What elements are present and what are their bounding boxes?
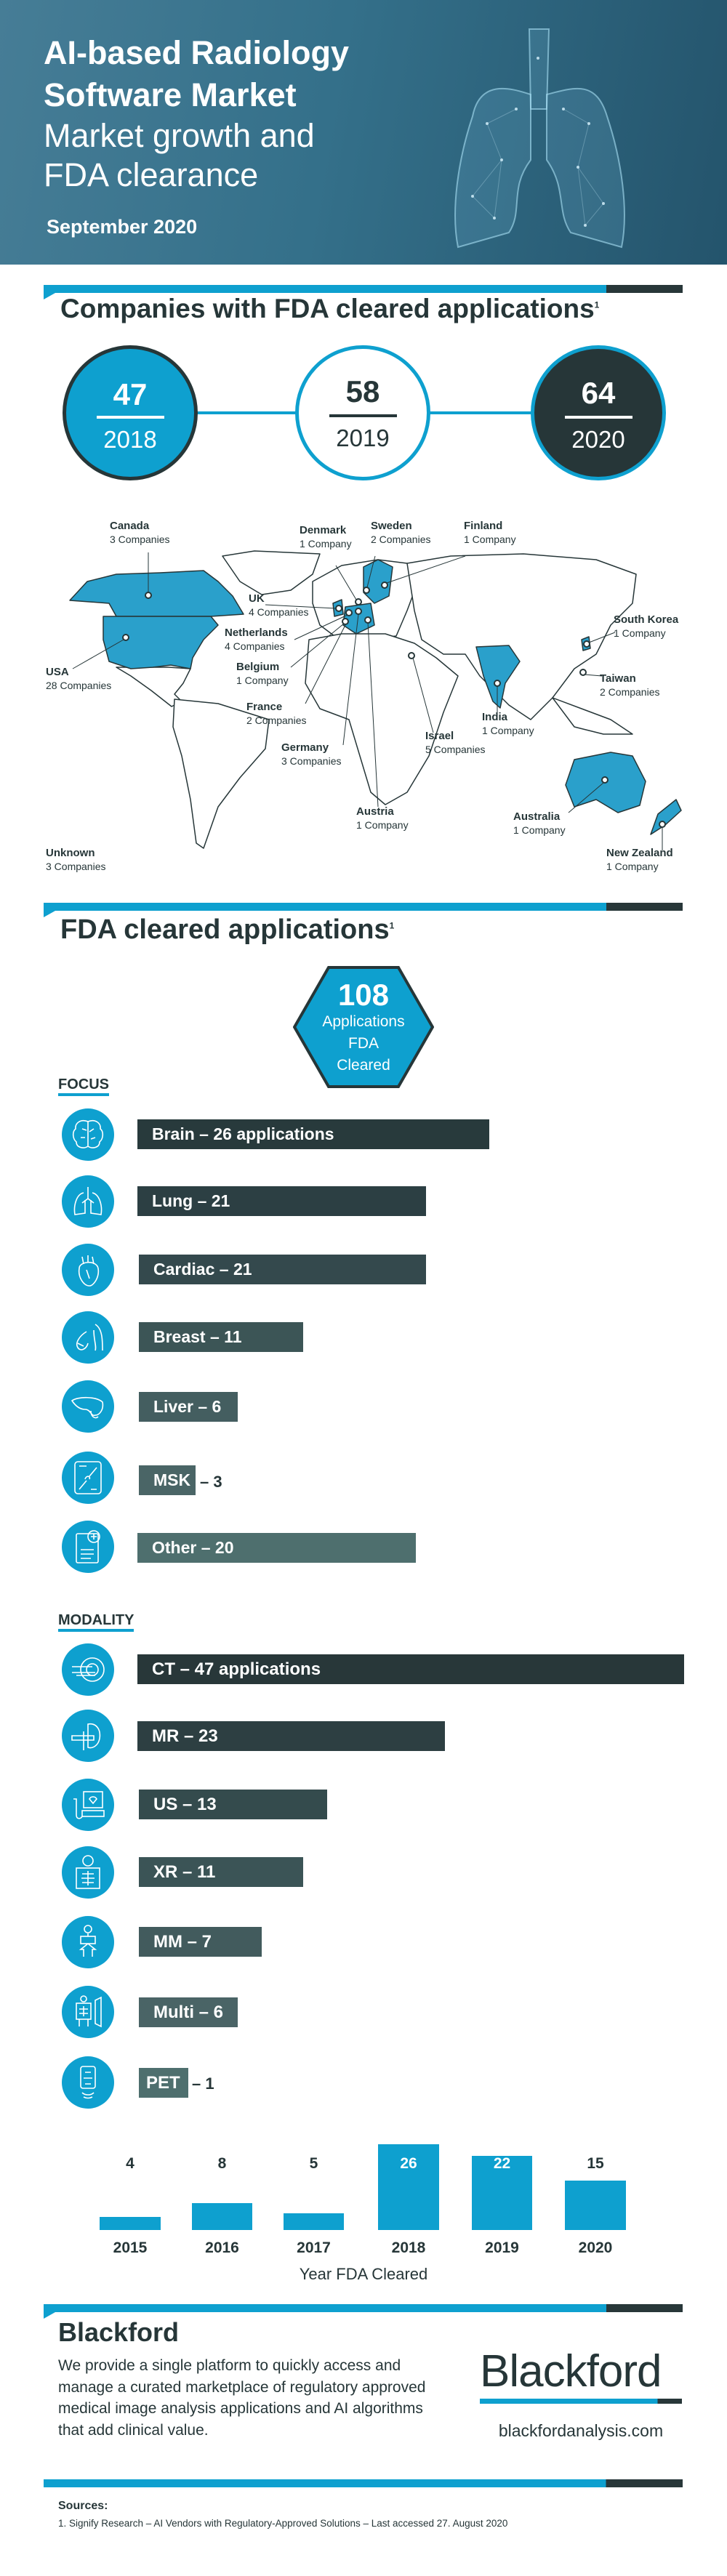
- circle 2020: [531, 345, 666, 480]
- heading: companies: Companies with FDA cleared applications1: [60, 294, 599, 323]
- world map: 1 Company: [236, 675, 289, 686]
- circle 2019: 58: [346, 374, 379, 408]
- bar: CT: [137, 1654, 684, 1684]
- column chart: year FDA cleared: 2018: [392, 2239, 425, 2256]
- illustration: glowing lungs: [454, 28, 625, 249]
- circle 2019: [295, 345, 430, 480]
- world map: 1 Company: [606, 861, 659, 872]
- icon: breast: [62, 1311, 114, 1364]
- world map: 2 Companies: [600, 686, 660, 698]
- column chart: year FDA cleared: 15: [587, 2155, 604, 2172]
- hexagon: 108 applications: Applications: [322, 1013, 405, 1030]
- timeline circles: [63, 345, 666, 480]
- world map: 1 Company: [356, 819, 409, 831]
- sources: [58, 2500, 507, 2529]
- footer: Blackford about: We provide a single platform to quickly access and manage a curated marketplace of regulatory approved medical image analysis applications and AI algorithms that add clinical value.: [58, 2357, 425, 2438]
- icon: CT: [62, 1643, 114, 1696]
- bar: XR: XR – 11: [153, 1862, 215, 1882]
- bar: PET: [139, 2068, 188, 2098]
- world map: USA: [46, 666, 69, 678]
- value: msk: – 3: [200, 1473, 222, 1491]
- bar: lung: Lung – 21: [152, 1191, 230, 1210]
- hexagon: 108 applications: 108: [338, 978, 389, 1012]
- column chart: year FDA cleared: 4: [126, 2155, 134, 2172]
- circle 2020: 64: [582, 376, 615, 410]
- footer: Blackford about: Blackford: [58, 2317, 179, 2347]
- map labels: [110, 520, 170, 545]
- bar: liver: [139, 1392, 238, 1422]
- world map: Denmark: [300, 524, 346, 536]
- column chart: year FDA cleared: 2020: [579, 2239, 612, 2256]
- world map: Austria: [356, 805, 394, 818]
- world map: 1 Company: [300, 538, 352, 550]
- bar: brain: Brain – 26 applications: [152, 1124, 334, 1143]
- bar: breast: Breast – 11: [153, 1327, 241, 1346]
- logo: Blackford: blackfordanalysis.com: [499, 2421, 663, 2440]
- heading: FDA cleared applications: FDA cleared applications1: [60, 914, 394, 945]
- bar: cardiac: Cardiac – 21: [153, 1260, 252, 1279]
- icon: US: [62, 1779, 114, 1831]
- world map: Unknown: [46, 847, 95, 859]
- world map: 1 Company: [464, 534, 516, 545]
- circle 2020: 2020: [571, 426, 625, 453]
- date: September 2020: [47, 216, 197, 238]
- world map: 2 Companies: [246, 715, 307, 726]
- world map: 28 Companies: [46, 680, 111, 691]
- world map: 5 Companies: [425, 744, 486, 755]
- world map: New Zealand: [606, 847, 673, 859]
- world map: 1 Company: [614, 627, 666, 639]
- sources: Sources:: [58, 2500, 108, 2512]
- circle 2019: 2019: [336, 424, 390, 451]
- world map: Taiwan: [600, 672, 636, 685]
- bar: PET: PET: [146, 2073, 180, 2093]
- column chart: year FDA cleared: 2015: [113, 2239, 147, 2256]
- icon: XR: [62, 1846, 114, 1899]
- map labels: 3 Companies: [110, 534, 170, 545]
- world map: 1 Company: [482, 725, 534, 736]
- world map: Australia: [513, 810, 560, 823]
- bar: other: Other – 20: [152, 1538, 234, 1557]
- map labels: Canada: [110, 520, 149, 532]
- world map: France: [246, 701, 282, 713]
- world map: 1 Company: [513, 824, 566, 836]
- world map: Germany: [281, 741, 329, 754]
- bar: cardiac: [139, 1255, 426, 1284]
- world map: Israel: [425, 730, 454, 742]
- bar: msk: MSK: [153, 1470, 190, 1489]
- column chart: year FDA cleared: 8: [218, 2155, 226, 2172]
- title: [44, 34, 349, 113]
- hexagon: 108 applications: Cleared: [337, 1057, 390, 1074]
- focus chart: [62, 1108, 489, 1573]
- circle 2018: [63, 345, 198, 480]
- column chart: year FDA cleared: 22: [494, 2155, 510, 2172]
- modality chart: [62, 1643, 684, 2109]
- world map: South Korea: [614, 613, 678, 626]
- bar: US: US – 13: [153, 1795, 217, 1814]
- bar: MR: [137, 1721, 445, 1751]
- world map: Belgium: [236, 661, 279, 673]
- icon: brain: [62, 1108, 114, 1161]
- icon: lung: [62, 1175, 114, 1228]
- world map: 3 Companies: [46, 861, 106, 872]
- icon: liver: [62, 1380, 114, 1433]
- value: PET: – 1: [192, 2074, 214, 2093]
- hexagon: 108 applications: [293, 966, 434, 1088]
- world map: UK: [249, 592, 265, 605]
- world map: 4 Companies: [249, 606, 308, 618]
- bar: Multi: [139, 1997, 238, 2027]
- column chart: year FDA cleared: Year FDA Cleared: [300, 2265, 427, 2283]
- bar: MR: MR – 23: [152, 1726, 218, 1746]
- bar: US: [139, 1790, 327, 1819]
- icon: other: [62, 1521, 114, 1573]
- title: Software Market: [44, 76, 297, 113]
- world map: Sweden: [371, 520, 412, 532]
- icon: MR: [62, 1710, 114, 1762]
- column chart: year FDA cleared: [100, 2144, 626, 2283]
- bar: brain: [137, 1119, 489, 1149]
- circle 2018: 47: [113, 377, 147, 411]
- world map: 2 Companies: [371, 534, 430, 545]
- bar: liver: Liver – 6: [153, 1397, 221, 1416]
- sources: 1. Signify Research – AI Vendors with Regulatory-Approved Solutions – Last accessed 27. August 2020: [58, 2518, 507, 2529]
- bar: MM: MM – 7: [153, 1932, 212, 1952]
- divider bar: [44, 2479, 683, 2487]
- world map: 3 Companies: [281, 755, 342, 767]
- icon: MM: [62, 1916, 114, 1968]
- bar: msk: [139, 1465, 196, 1495]
- subtitle: [44, 117, 315, 193]
- icon: cardiac: [62, 1244, 114, 1296]
- bar: MM: [139, 1927, 262, 1957]
- world map: India: [482, 711, 507, 723]
- hexagon: 108 applications: FDA: [348, 1035, 379, 1052]
- footer: Blackford about: [58, 2317, 425, 2438]
- icon: Multi: [62, 1986, 114, 2038]
- icon: PET: [62, 2056, 114, 2109]
- bar: CT: CT – 47 applications: [152, 1659, 321, 1679]
- world map: [46, 520, 682, 872]
- world map: Netherlands: [225, 627, 288, 639]
- label: MODALITY: MODALITY: [58, 1612, 134, 1628]
- logo: Blackford: Blackford: [480, 2346, 661, 2396]
- column chart: year FDA cleared: 26: [400, 2155, 417, 2172]
- subtitle: FDA clearance: [44, 156, 258, 193]
- column chart: year FDA cleared: 2017: [297, 2239, 331, 2256]
- bar: XR: [139, 1857, 303, 1887]
- subtitle: Market growth and: [44, 117, 315, 154]
- column chart: year FDA cleared: 2016: [205, 2239, 239, 2256]
- header banner: [0, 0, 727, 265]
- bar: other: [137, 1533, 416, 1563]
- world map: Finland: [464, 520, 502, 532]
- icon: msk: [62, 1452, 114, 1504]
- logo: Blackford: [480, 2346, 682, 2440]
- world map: 4 Companies: [225, 640, 285, 652]
- bar: Multi: Multi – 6: [153, 2003, 223, 2022]
- column chart: year FDA cleared: 2019: [485, 2239, 519, 2256]
- circle 2018: 2018: [103, 426, 157, 453]
- bar: lung: [137, 1186, 426, 1216]
- column chart: year FDA cleared: 5: [310, 2155, 318, 2172]
- title: AI-based Radiology: [44, 34, 349, 71]
- bar: breast: [139, 1322, 303, 1352]
- label: FOCUS: FOCUS: [58, 1076, 109, 1092]
